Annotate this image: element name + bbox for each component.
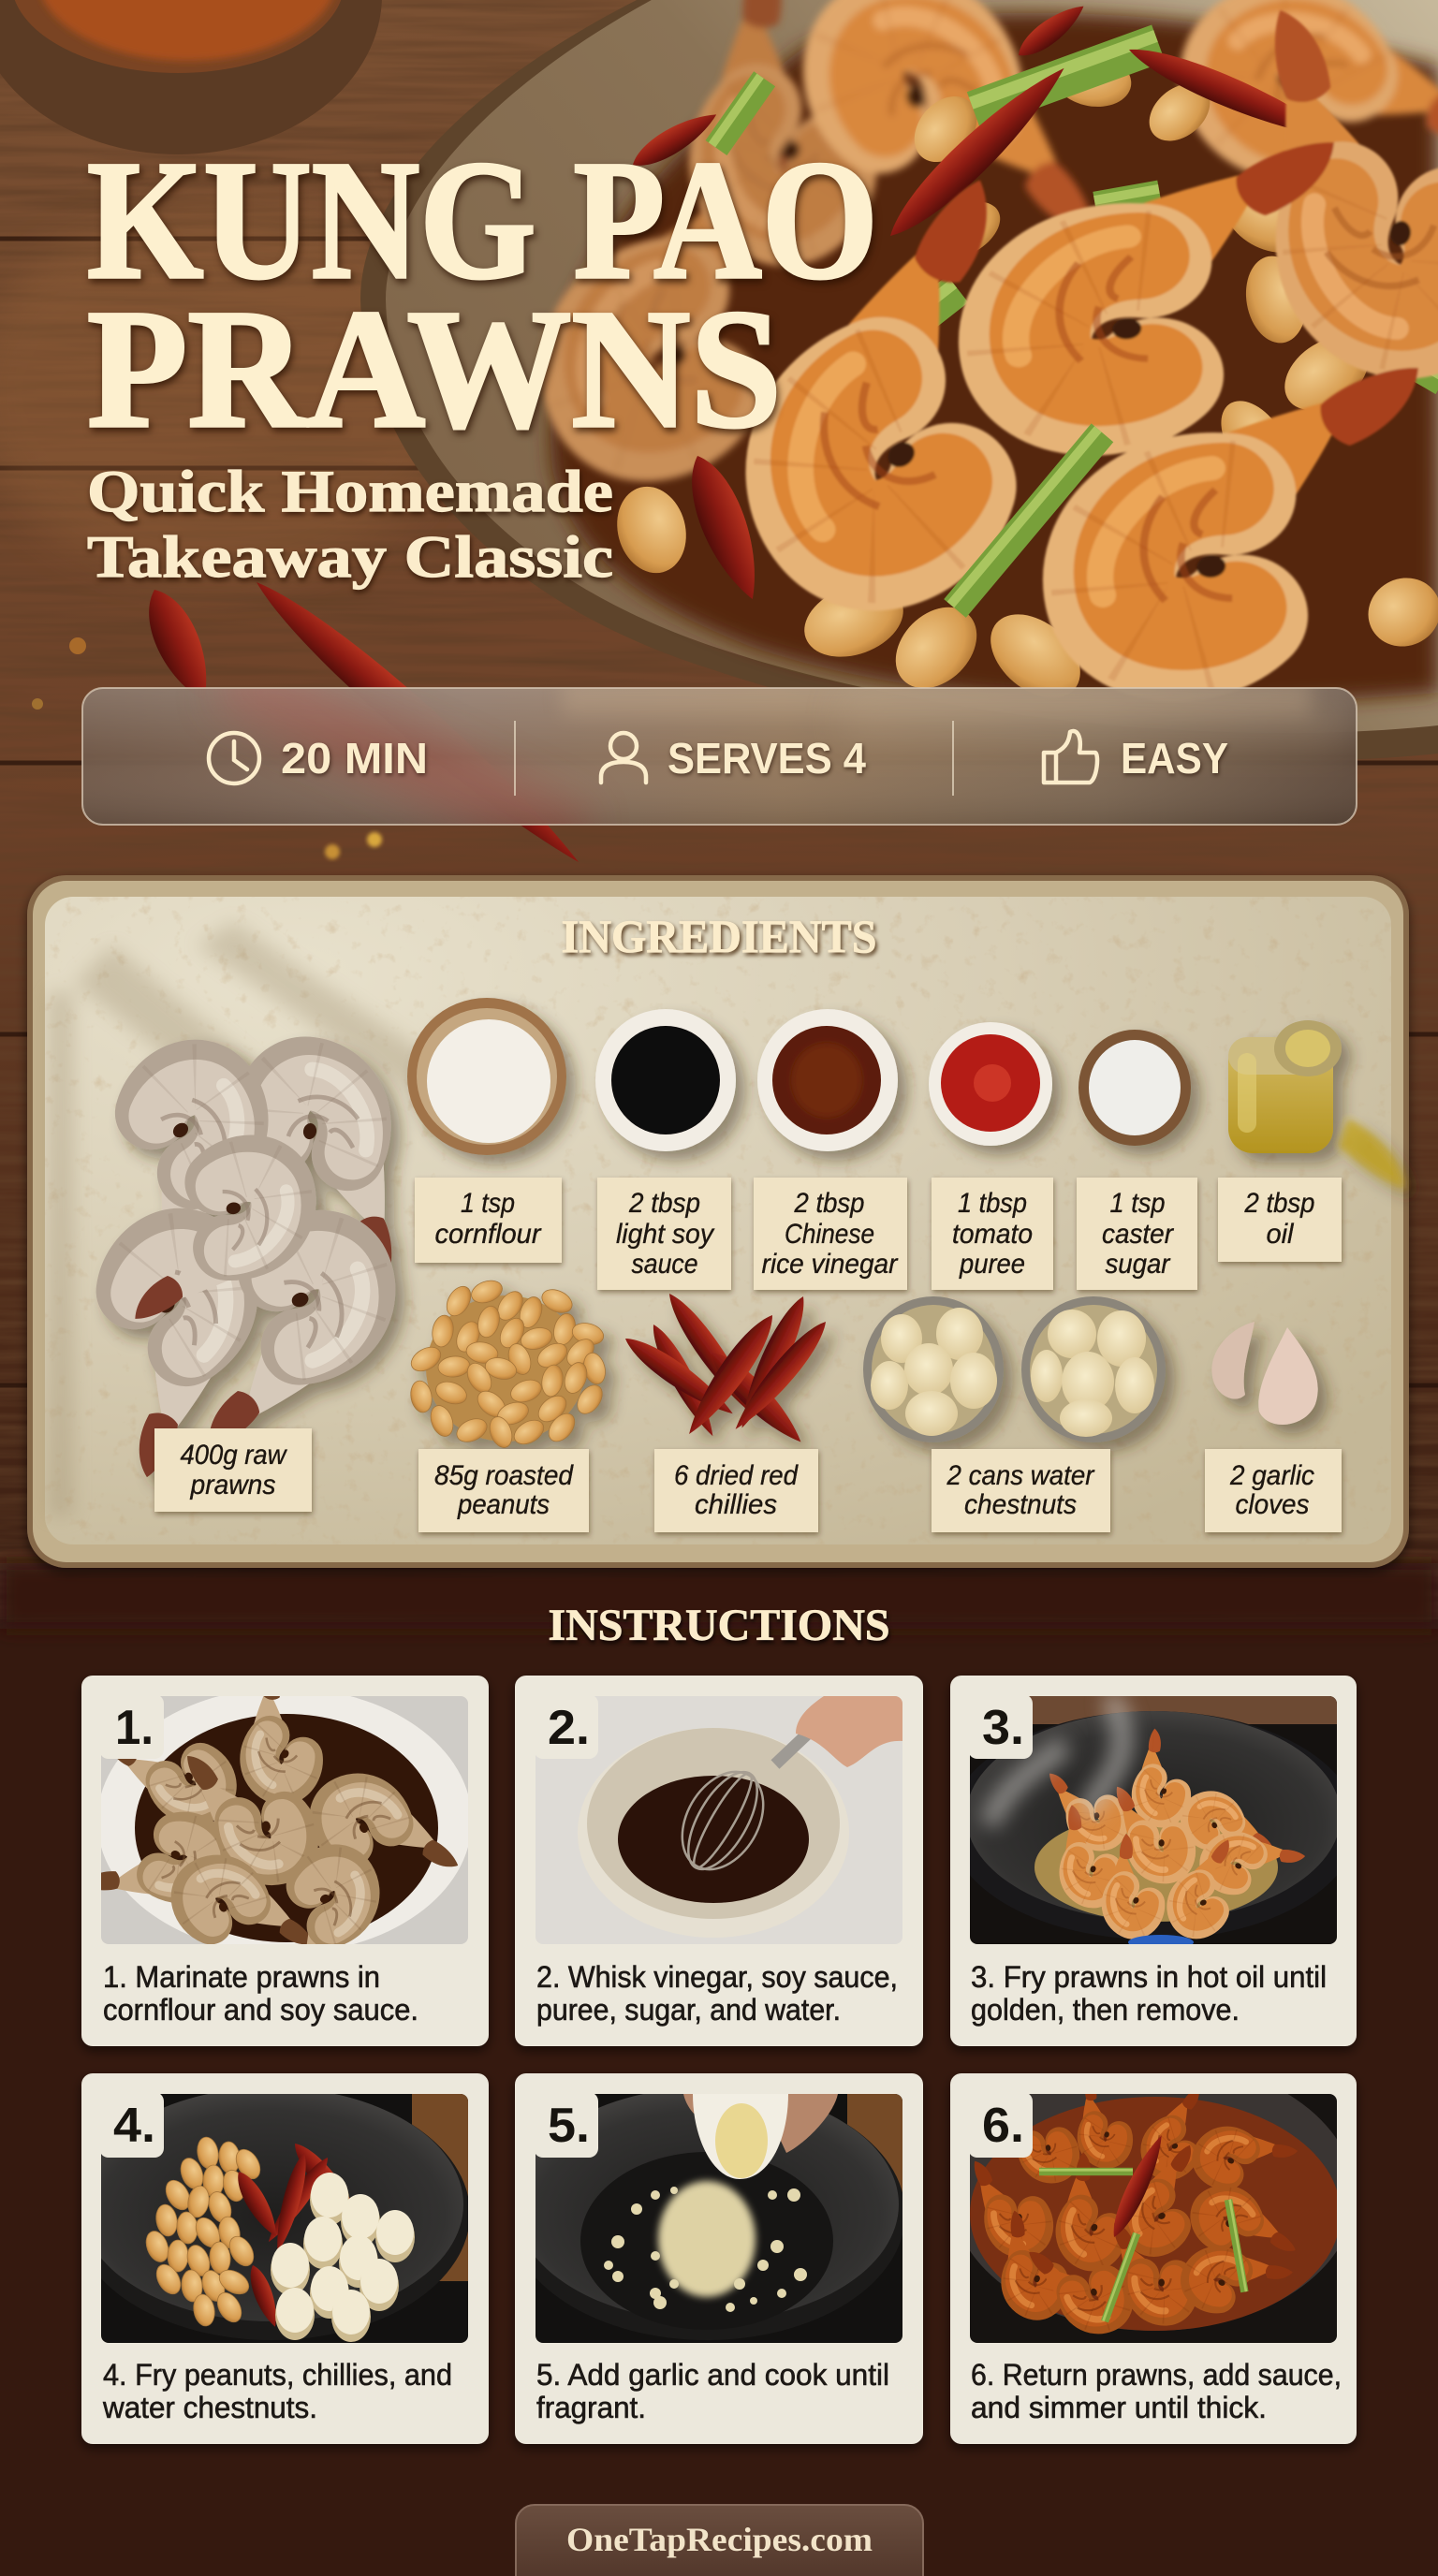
sauce and food base bbox=[550, 13, 1438, 704]
step text 4: water chestnuts. bbox=[102, 2391, 317, 2424]
step text 3: 3. Fry prawns in hot oil until bbox=[971, 1960, 1327, 1994]
peanuts pile bbox=[407, 1277, 609, 1451]
step card 2 bbox=[515, 1676, 923, 2046]
label: garlic: cloves bbox=[1236, 1489, 1309, 1520]
label: chillies: 6 dried red bbox=[674, 1460, 799, 1491]
stat: time: 20 MIN bbox=[281, 734, 428, 783]
plate bbox=[360, 0, 1438, 760]
step text 6: 6. Return prawns, add sauce, bbox=[971, 2358, 1342, 2392]
step card 5 bbox=[508, 2073, 923, 2444]
step card 6 bbox=[950, 2059, 1357, 2444]
tomato puree bowl bbox=[929, 1022, 1052, 1146]
step text 6: and simmer until thick. bbox=[971, 2391, 1267, 2424]
subtitle: Takeaway Classic bbox=[87, 523, 613, 590]
subtitle bbox=[87, 458, 613, 590]
front spring onion bbox=[944, 423, 1113, 618]
label: caster sugar: caster bbox=[1102, 1219, 1174, 1250]
spring onions bbox=[706, 24, 1438, 394]
ingredient labels bbox=[154, 1178, 1342, 1532]
step number 6 bbox=[968, 2092, 1033, 2158]
label: tomato puree bbox=[932, 1178, 1053, 1290]
panel: ingredients tray bbox=[27, 875, 1409, 1568]
label: soy sauce: light soy bbox=[616, 1219, 715, 1250]
label: prawns bbox=[154, 1428, 312, 1512]
table bowl of chilli flakes bbox=[0, 0, 382, 154]
step number 6: 6. bbox=[982, 2099, 1024, 2153]
heading: ingredients: INGREDIENTS bbox=[562, 910, 876, 962]
rice vinegar bowl bbox=[757, 1009, 898, 1151]
step text 4 bbox=[102, 2358, 452, 2424]
title: PRAWNS bbox=[87, 275, 782, 463]
wood table background bbox=[0, 0, 1438, 1629]
stats bar bbox=[81, 687, 1357, 826]
blurred background prawns bbox=[536, 0, 1438, 445]
label: water chestnuts bbox=[932, 1449, 1110, 1532]
step text 6 bbox=[971, 2358, 1342, 2424]
step number 1: 1. bbox=[115, 1701, 154, 1755]
dried chillies bbox=[619, 1287, 834, 1451]
step image: simmering prawns bbox=[970, 2094, 1337, 2343]
label: oil: 2 tbsp bbox=[1244, 1188, 1314, 1219]
step text 3: golden, then remove. bbox=[971, 1993, 1240, 2027]
label: peanuts bbox=[418, 1449, 589, 1532]
label: water chestnuts: 2 cans water bbox=[946, 1460, 1094, 1491]
step text 1 bbox=[103, 1960, 418, 2027]
step text 1: 1. Marinate prawns in bbox=[103, 1960, 380, 1994]
stat: difficulty: EASY bbox=[1121, 734, 1228, 783]
garlic cloves bbox=[1211, 1322, 1318, 1425]
label: prawns: prawns bbox=[190, 1470, 275, 1500]
cornflour bowl bbox=[407, 998, 566, 1155]
large prawns bbox=[706, 10, 1438, 650]
step number 4: 4. bbox=[113, 2099, 155, 2153]
footer website badge bbox=[516, 2505, 923, 2576]
step text 4: 4. Fry peanuts, chillies, and bbox=[103, 2358, 452, 2392]
step text 5: 5. Add garlic and cook until bbox=[536, 2358, 889, 2392]
icon: clock bbox=[209, 733, 259, 783]
label: garlic: 2 garlic bbox=[1229, 1460, 1314, 1491]
label: soy sauce: sauce bbox=[631, 1249, 698, 1280]
stat: time bbox=[209, 733, 428, 783]
stat: servings: SERVES 4 bbox=[668, 734, 866, 783]
title: KUNG PAO bbox=[87, 126, 878, 315]
label: caster sugar: 1 tsp bbox=[1110, 1188, 1165, 1219]
step text 5: fragrant. bbox=[536, 2391, 646, 2424]
heading: instructions: INSTRUCTIONS bbox=[549, 1601, 889, 1650]
label: oil bbox=[1218, 1178, 1342, 1262]
label: cornflour bbox=[415, 1178, 562, 1263]
label: soy sauce bbox=[597, 1178, 731, 1290]
label: tomato puree: 1 tbsp bbox=[958, 1188, 1027, 1219]
step text 2: 2. Whisk vinegar, soy sauce, bbox=[536, 1960, 898, 1994]
step number 5: 5. bbox=[548, 2099, 590, 2153]
label: rice vinegar: Chinese bbox=[785, 1219, 874, 1250]
hero plate of kung pao prawns bbox=[0, 0, 1438, 760]
step card 3 bbox=[949, 1676, 1357, 2046]
label: chillies bbox=[654, 1449, 818, 1532]
peanuts bbox=[608, 47, 1438, 715]
label: tomato puree: puree bbox=[959, 1249, 1025, 1280]
step text 5 bbox=[536, 2358, 889, 2424]
label: peanuts: 85g roasted bbox=[434, 1460, 574, 1491]
step text 2: puree, sugar, and water. bbox=[536, 1993, 841, 2027]
step card 1 bbox=[81, 1666, 489, 2046]
soy sauce bowl bbox=[595, 1009, 736, 1151]
label: caster sugar: sugar bbox=[1105, 1249, 1170, 1280]
step number 3 bbox=[968, 1694, 1033, 1759]
label: water chestnuts: chestnuts bbox=[964, 1489, 1077, 1520]
label: prawns: 400g raw bbox=[180, 1440, 288, 1471]
step number 2 bbox=[534, 1694, 598, 1759]
label: soy sauce: 2 tbsp bbox=[628, 1188, 700, 1219]
label: rice vinegar bbox=[754, 1178, 907, 1290]
step image: whisking sauce bbox=[536, 1696, 902, 1944]
stat: difficulty bbox=[1044, 731, 1228, 783]
table chillies and nuts bbox=[32, 567, 592, 877]
step image: frying prawns bbox=[970, 1696, 1337, 1944]
label: rice vinegar: rice vinegar bbox=[762, 1249, 898, 1280]
label: peanuts: peanuts bbox=[457, 1489, 550, 1520]
footer website badge: OneTapRecipes.com bbox=[566, 2521, 873, 2558]
label: cornflour: cornflour bbox=[434, 1219, 541, 1250]
step number 4 bbox=[99, 2092, 164, 2158]
label: tomato puree: tomato bbox=[952, 1219, 1033, 1250]
step text 1: cornflour and soy sauce. bbox=[103, 1993, 418, 2027]
water chestnuts cans bbox=[863, 1296, 1166, 1442]
step image: frying peanuts, chillies and chestnuts bbox=[73, 2087, 470, 2343]
step number 1 bbox=[99, 1694, 164, 1759]
step image: adding garlic bbox=[508, 2087, 905, 2343]
label: garlic bbox=[1205, 1449, 1342, 1532]
raw prawns bbox=[40, 1060, 422, 1478]
step number 3: 3. bbox=[982, 1701, 1024, 1755]
label: chillies: chillies bbox=[695, 1489, 777, 1520]
step image: marinating prawns bbox=[101, 1696, 468, 1944]
label: oil: oil bbox=[1266, 1219, 1295, 1250]
step text 3 bbox=[971, 1960, 1327, 2027]
oil bottle bbox=[1228, 1020, 1404, 1189]
step card 4 bbox=[73, 2073, 489, 2444]
label: rice vinegar: 2 tbsp bbox=[794, 1188, 865, 1219]
icon: person bbox=[601, 733, 646, 783]
title bbox=[87, 126, 878, 463]
step number 2: 2. bbox=[548, 1701, 590, 1755]
label: caster sugar bbox=[1077, 1178, 1197, 1290]
label: cornflour: 1 tsp bbox=[461, 1188, 515, 1219]
dried chillies bbox=[626, 0, 1345, 607]
step number 5 bbox=[534, 2092, 598, 2158]
step text 2 bbox=[536, 1960, 898, 2027]
subtitle: Quick Homemade bbox=[87, 458, 613, 524]
caster sugar bowl bbox=[1078, 1030, 1191, 1146]
icon: thumbs up bbox=[1044, 731, 1097, 783]
